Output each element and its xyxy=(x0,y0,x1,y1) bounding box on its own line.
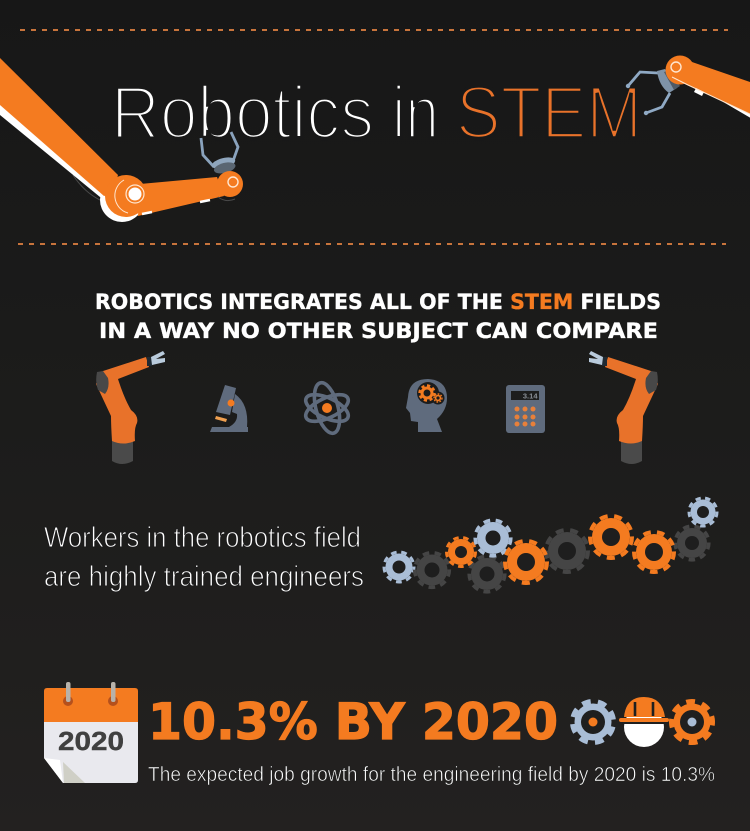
title: Robotics xyxy=(111,71,374,154)
stat: 10.3% by 2020: 10.3% BY 2020 xyxy=(148,693,558,751)
icon: gear right xyxy=(667,697,717,747)
icon: atom xyxy=(302,380,352,436)
icon: gear left xyxy=(568,697,618,747)
caption: The expected job growth for the engineering field by 2020 is 10.3% xyxy=(148,764,715,786)
text: workers: are highly trained engineers xyxy=(44,561,364,593)
icon: calculator: 3.14 xyxy=(523,392,538,401)
title: in xyxy=(392,71,439,154)
icon: engineer helmet xyxy=(619,697,669,747)
robot arm: top left xyxy=(0,58,243,222)
title xyxy=(111,71,642,154)
text: workers: Workers in the robotics field xyxy=(44,522,361,554)
subheading: IN A WAY NO OTHER SUBJECT CAN COMPARE xyxy=(99,319,658,343)
icon: head with gears xyxy=(406,379,447,432)
robot arm: top right xyxy=(626,56,750,117)
gear chain xyxy=(384,498,717,592)
calendar icon xyxy=(44,682,138,783)
title: STEM xyxy=(456,71,642,154)
text: workers xyxy=(44,522,364,593)
icon: microscope xyxy=(210,385,248,432)
small robot: right xyxy=(589,351,658,464)
icon: calculator xyxy=(506,385,545,433)
calendar icon: 2020 xyxy=(58,726,124,756)
subheading xyxy=(95,290,661,343)
small robot: left xyxy=(96,351,165,464)
subheading: ROBOTICS INTEGRATES ALL OF THE STEM FIELDS xyxy=(95,290,661,314)
